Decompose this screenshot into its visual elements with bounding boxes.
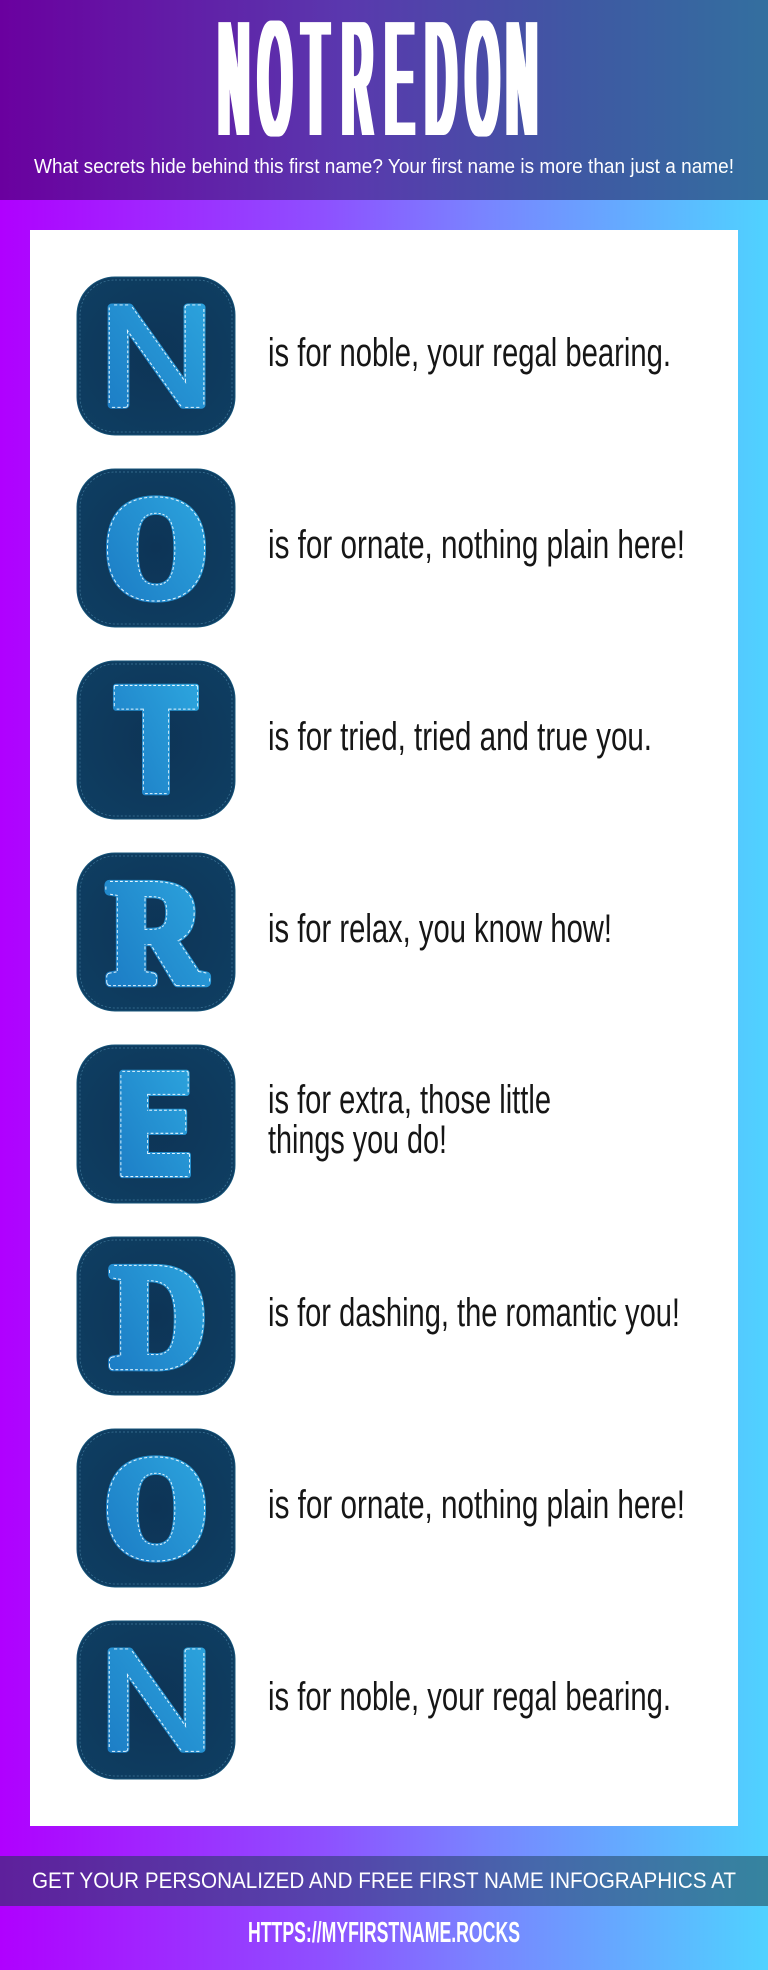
icon: letter N: N bbox=[99, 277, 214, 436]
icon: letter E: E bbox=[111, 1045, 197, 1209]
icon: letter N: N bbox=[99, 1621, 214, 1780]
icon: letter D: D bbox=[110, 1236, 207, 1399]
icon: letter R: R bbox=[107, 850, 206, 1014]
icon: letter O: O bbox=[105, 470, 207, 626]
row 1: N bbox=[77, 277, 671, 436]
icon: letter O bbox=[77, 469, 235, 627]
icon: letter T: T bbox=[115, 659, 197, 827]
footer call to action: GET YOUR PERSONALIZED AND FREE FIRST NAME INFOGRAPHICS AT bbox=[32, 1868, 736, 1893]
row 3: T bbox=[77, 659, 652, 827]
icon: letter O: O bbox=[105, 470, 207, 626]
icon: letter N: N bbox=[99, 1621, 214, 1780]
row 4: R bbox=[77, 850, 612, 1014]
row 7: O bbox=[77, 1429, 685, 1587]
text: extra bbox=[268, 1078, 551, 1162]
row 6: D bbox=[77, 1236, 680, 1399]
icon: letter R: R bbox=[107, 850, 206, 1014]
text: relax: is for relax, you know how! bbox=[268, 907, 612, 951]
icon: letter O: O bbox=[105, 1430, 207, 1586]
footer band bbox=[0, 1856, 768, 1906]
icon: letter T: T bbox=[115, 659, 197, 827]
icon: letter D: D bbox=[110, 1236, 207, 1399]
icon: letter D: D bbox=[110, 1236, 207, 1399]
panel: white content card bbox=[30, 230, 738, 1826]
icon: letter O: O bbox=[105, 1430, 207, 1586]
icon: letter D bbox=[77, 1236, 235, 1399]
icon: letter E bbox=[77, 1045, 235, 1209]
icon: letter N: N bbox=[99, 277, 214, 436]
icon: letter T bbox=[77, 659, 235, 827]
icon: letter E: E bbox=[111, 1045, 197, 1209]
icon: letter N: N bbox=[99, 1621, 214, 1780]
row 2: O bbox=[77, 469, 685, 627]
icon: letter O: O bbox=[105, 470, 207, 626]
subtitle: What secrets hide behind this first name? Your first name is more than just a name! bbox=[34, 155, 734, 178]
icon: letter E: E bbox=[111, 1045, 197, 1209]
row 5: E bbox=[77, 1045, 551, 1209]
icon: letter N: N bbox=[99, 277, 214, 436]
text: extra: things you do! bbox=[268, 1118, 447, 1162]
text: extra: is for extra, those little bbox=[268, 1078, 551, 1122]
icon: letter O: O bbox=[105, 1430, 207, 1586]
footer url: HTTPS://MYFIRSTNAME.ROCKS bbox=[248, 1917, 520, 1949]
icon: letter O bbox=[77, 1429, 235, 1587]
icon: letter R bbox=[77, 850, 235, 1014]
icon: letter T: T bbox=[115, 659, 197, 827]
header band bbox=[0, 0, 768, 200]
icon: letter R: R bbox=[107, 850, 206, 1014]
row 8: N bbox=[77, 1621, 671, 1780]
